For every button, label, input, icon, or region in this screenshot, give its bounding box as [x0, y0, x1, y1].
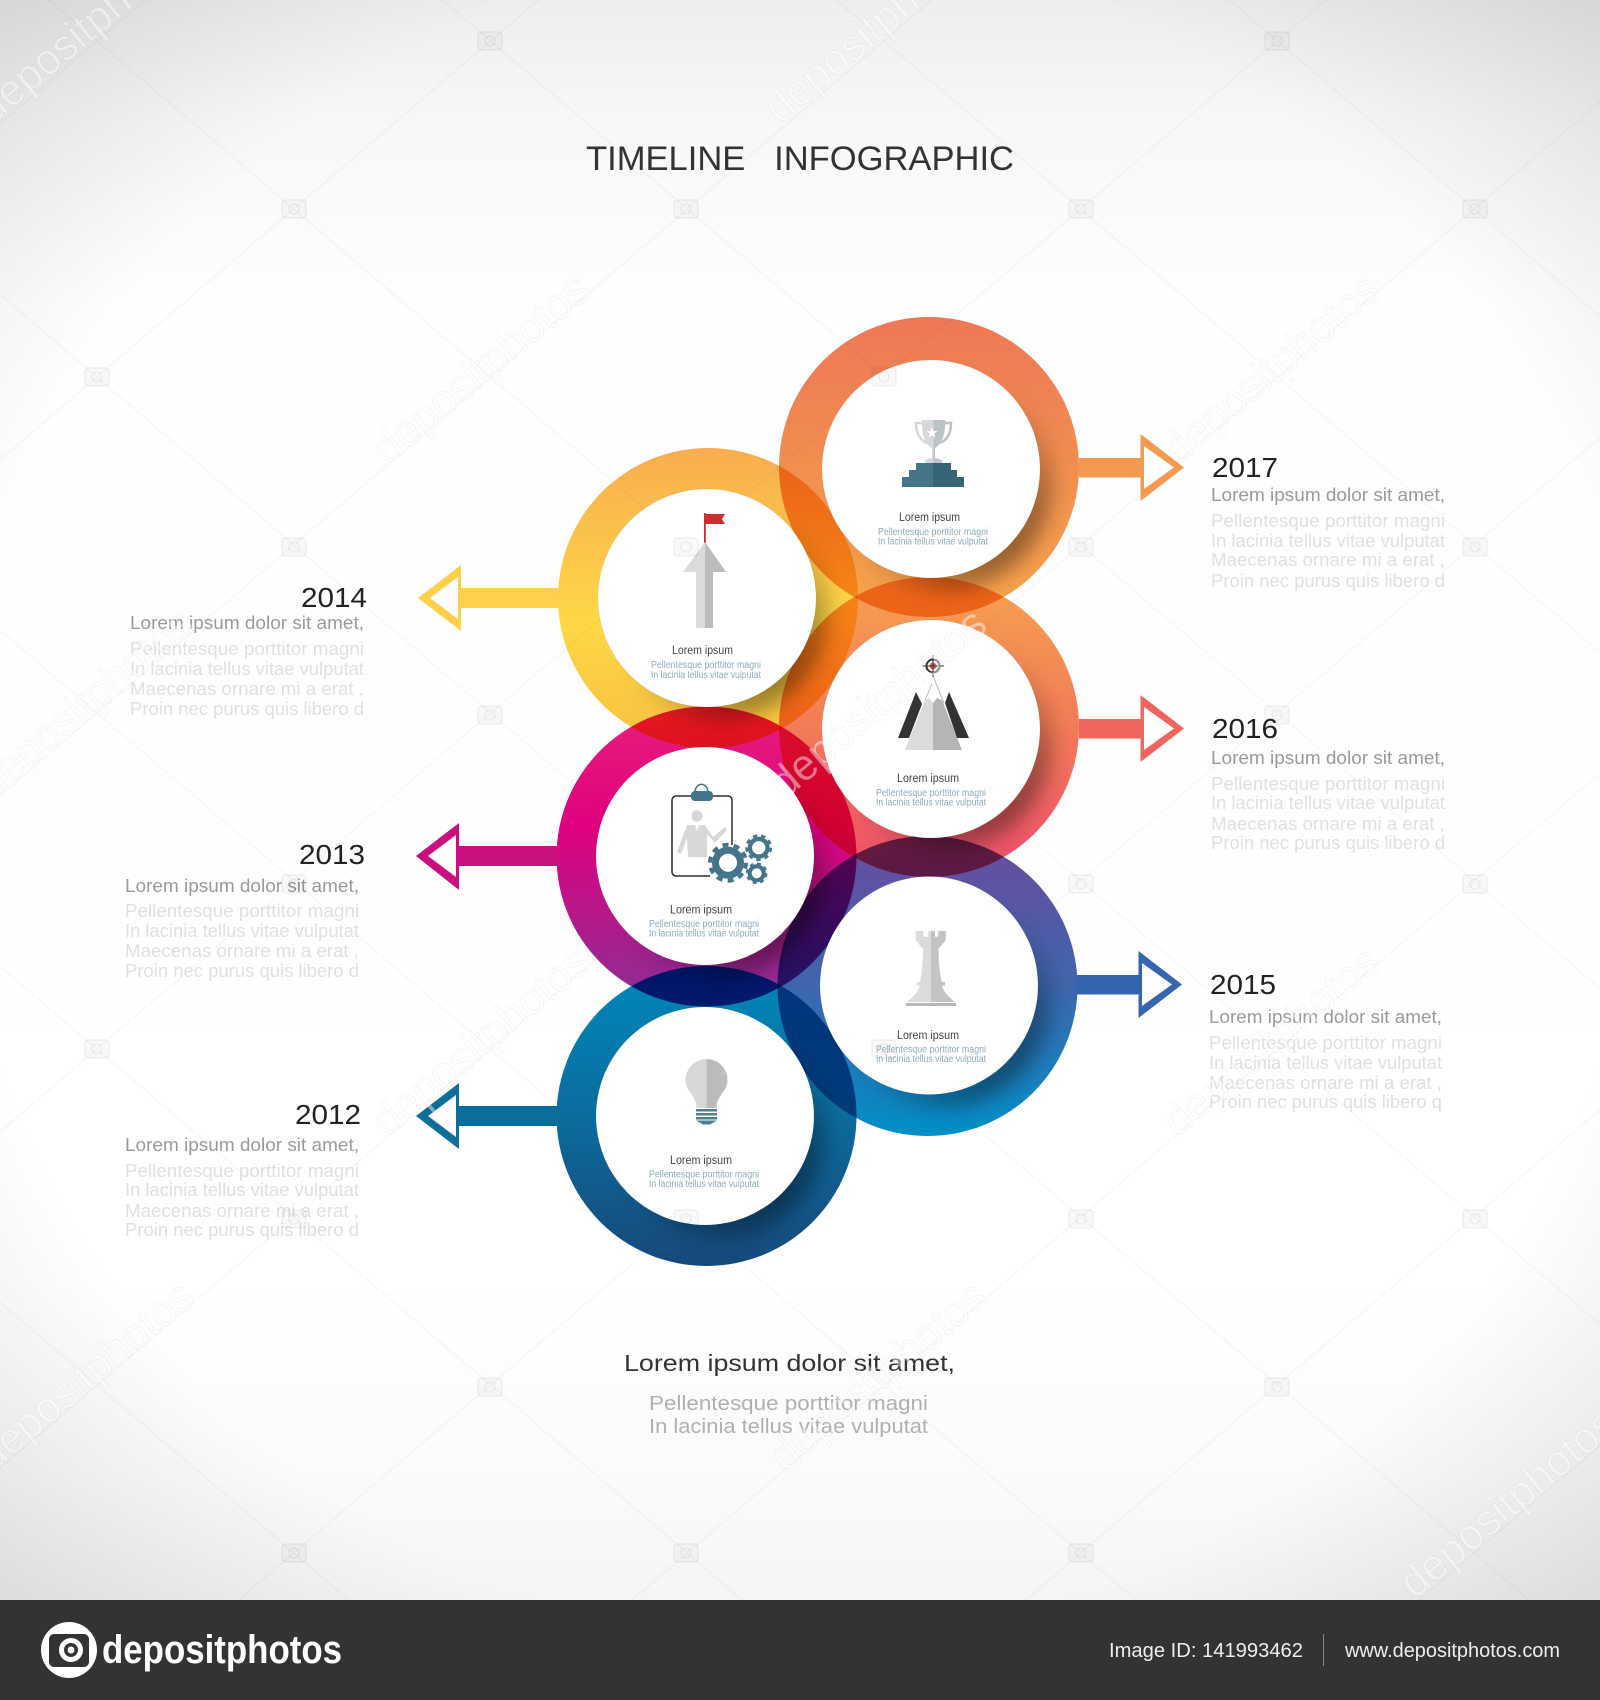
caption 2014: In lacinia tellus vitae vulputat	[651, 670, 761, 681]
ring 2013	[556, 706, 856, 1006]
caption 2017	[878, 512, 988, 548]
text block: 2016: Proin nec purus quis libero d	[1211, 833, 1445, 853]
arrow 2012	[416, 1083, 558, 1149]
icon: mountain with target	[898, 655, 969, 750]
text block: 2017: In lacinia tellus vitae vulputat	[1211, 531, 1445, 551]
watermark: depositphotos	[363, 264, 599, 474]
text block: 2017: Maecenas ornare mi a erat ,	[1211, 550, 1445, 570]
footer bar	[0, 1600, 1600, 1700]
footer logo	[41, 1622, 342, 1678]
text block: 2017: Proin nec purus quis libero d	[1211, 571, 1445, 591]
text block: 2015: Lorem ipsum dolor sit amet,	[1209, 1007, 1442, 1027]
text block: 2013: 2013	[299, 839, 365, 870]
arrow 2013	[416, 823, 558, 890]
caption 2015: Pellentesque porttitor magni	[876, 1044, 986, 1056]
ring 2014	[558, 448, 858, 748]
caption 2013: Lorem ipsum	[670, 904, 732, 916]
caption 2012: In lacinia tellus vitae vulputat	[649, 1179, 759, 1190]
arrow 2016	[1079, 695, 1184, 762]
caption 2014: Pellentesque porttitor magni	[651, 660, 761, 671]
text block: 2013: Pellentesque porttitor magni	[125, 901, 359, 921]
text block: 2016: Lorem ipsum dolor sit amet,	[1211, 748, 1445, 768]
text block: 2012: Proin nec purus quis libero d	[125, 1220, 359, 1240]
text block: 2016: In lacinia tellus vitae vulputat	[1211, 793, 1445, 813]
text block: 2014: Proin nec purus quis libero d	[130, 699, 364, 719]
text block: 2016	[1211, 713, 1445, 853]
caption 2017: Lorem ipsum	[899, 512, 960, 524]
caption 2015: In lacinia tellus vitae vulputat	[876, 1054, 986, 1065]
arrow 2015	[1077, 951, 1182, 1018]
caption 2016: Pellentesque porttitor magni	[876, 788, 986, 799]
rings	[556, 317, 1079, 1266]
icon: chess rook	[906, 931, 956, 1006]
text block: 2016: 2016	[1212, 713, 1278, 744]
panel: circle 2015	[820, 876, 1038, 1094]
caption 2016	[876, 773, 986, 808]
footer image id: Image ID: 141993462	[1109, 1640, 1303, 1662]
text block: 2015: In lacinia tellus vitae vulputat	[1209, 1053, 1442, 1073]
watermark: depositphotos	[1153, 264, 1389, 474]
text block: 2015: Pellentesque porttitor magni	[1209, 1033, 1442, 1053]
watermark: depositphotos	[363, 936, 599, 1146]
text block: bottom summary: Lorem ipsum dolor sit amet,	[624, 1350, 955, 1376]
text block: 2012: In lacinia tellus vitae vulputat	[125, 1180, 359, 1200]
text block: 2015	[1209, 969, 1442, 1112]
text block: 2015: Maecenas ornare mi a erat ,	[1209, 1073, 1442, 1093]
caption 2017: In lacinia tellus vitae vulputat	[878, 536, 988, 548]
text block: 2016: Maecenas ornare mi a erat ,	[1211, 814, 1445, 834]
caption 2014	[651, 645, 761, 681]
caption 2012	[649, 1155, 759, 1190]
caption 2012: Pellentesque porttitor magni	[649, 1170, 759, 1180]
text block: 2017: Lorem ipsum dolor sit amet,	[1211, 485, 1445, 505]
arrow 2014	[418, 565, 559, 631]
footer url: www.depositphotos.com	[1344, 1640, 1560, 1662]
text block: 2013: Proin nec purus quis libero d	[125, 961, 359, 981]
text block: 2012: Pellentesque porttitor magni	[125, 1161, 359, 1181]
icon: light bulb	[686, 1059, 728, 1124]
caption 2013: Pellentesque porttitor magni	[649, 919, 759, 930]
text block: 2013: In lacinia tellus vitae vulputat	[125, 921, 359, 941]
ring 2017	[779, 317, 1079, 617]
text block: 2015: 2015	[1210, 969, 1276, 1000]
text block: 2013	[125, 839, 365, 981]
icon: clipboard with person and gears	[672, 784, 771, 883]
text block: 2014	[130, 582, 367, 719]
text block: 2013: Lorem ipsum dolor sit amet,	[125, 876, 359, 896]
panel: circle 2013	[596, 747, 814, 965]
panel: circle 2016	[822, 620, 1040, 838]
text block: 2015: Proin nec purus quis libero q	[1209, 1092, 1442, 1112]
watermark: depositphotos	[760, 598, 996, 808]
text block: 2016: Pellentesque porttitor magni	[1211, 774, 1445, 794]
panel: circle 2014	[598, 489, 816, 707]
text block: 2014: 2014	[301, 582, 367, 613]
text block: 2014: Maecenas ornare mi a erat ,	[130, 679, 364, 699]
text block: bottom summary: In lacinia tellus vitae vulputat	[649, 1416, 928, 1438]
watermark: depositphotos	[1153, 936, 1389, 1146]
ring shadows	[608, 372, 1052, 1237]
caption 2016: In lacinia tellus vitae vulputat	[876, 798, 986, 808]
text block: 2014: In lacinia tellus vitae vulputat	[130, 659, 364, 679]
text block: 2017: 2017	[1212, 452, 1278, 483]
ring 2016	[779, 577, 1079, 877]
icon: arrow with flag	[683, 513, 726, 628]
ring 2015	[778, 836, 1078, 1136]
text block: 2014: Lorem ipsum dolor sit amet,	[130, 613, 364, 633]
caption 2016: Lorem ipsum	[897, 773, 959, 785]
text block: 2017: Pellentesque porttitor magni	[1211, 511, 1445, 531]
footer logo: depositphotos	[102, 1628, 342, 1672]
text block: bottom summary: Pellentesque porttitor magni	[649, 1393, 928, 1415]
title: TIMELINE INFOGRAPHIC	[586, 140, 1014, 178]
panel: circle 2017	[822, 360, 1040, 578]
watermark: depositphotos	[760, 1271, 996, 1481]
caption 2015: Lorem ipsum	[897, 1030, 959, 1042]
text block: 2012: 2012	[295, 1099, 361, 1130]
text block: 2012: Maecenas ornare mi a erat ,	[125, 1201, 359, 1221]
text block: 2014: Pellentesque porttitor magni	[130, 639, 364, 659]
caption 2017: Pellentesque porttitor magni	[878, 527, 988, 538]
caption 2013: In lacinia tellus vitae vulputat	[649, 928, 759, 940]
text block: 2017	[1211, 452, 1445, 591]
panel: circle 2012	[596, 1007, 814, 1225]
caption 2014: Lorem ipsum	[672, 645, 733, 657]
arrows	[416, 434, 1184, 1149]
caption 2015	[876, 1030, 986, 1065]
caption 2012: Lorem ipsum	[670, 1155, 732, 1167]
text block: 2012: Lorem ipsum dolor sit amet,	[125, 1135, 359, 1155]
caption 2013	[649, 904, 759, 940]
ring 2012	[556, 966, 856, 1266]
icon: trophy on podium	[902, 420, 964, 487]
arrow 2017	[1079, 434, 1184, 501]
text block: 2012	[125, 1099, 361, 1240]
text block: bottom summary	[624, 1350, 955, 1438]
text block: 2013: Maecenas ornare mi a erat ,	[125, 941, 359, 961]
